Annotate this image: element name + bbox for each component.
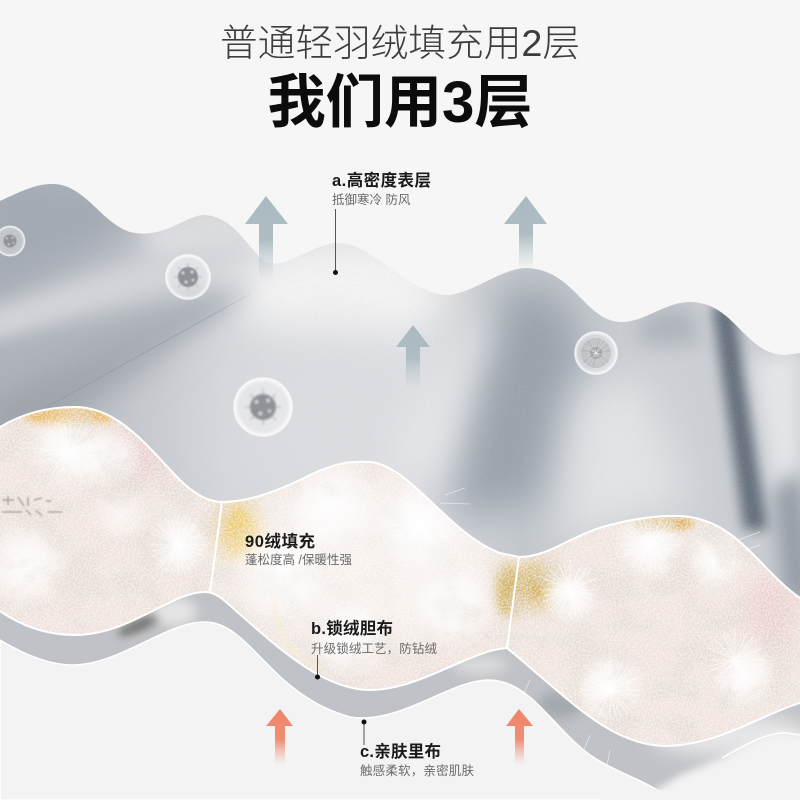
panel: skin-friendly lining white area <box>0 622 800 800</box>
callout: c skin-friendly lining: c.亲肤里布 <box>360 742 441 761</box>
icon: virus bubble upper middle <box>165 254 211 300</box>
callout: 90 down filling: 蓬松度高 /保暖性强 <box>245 552 352 567</box>
panel: outer high-density fabric layer <box>0 184 800 597</box>
panel: down filling layer <box>0 400 800 750</box>
icon: virus bubble right <box>574 331 618 375</box>
callout: b down-proof liner <box>311 618 437 680</box>
callout: 90 down filling: 90绒填充 <box>245 531 316 551</box>
title: normal down jackets: 普通轻羽绒填充用2层 <box>220 22 580 64</box>
arrow: upper right vapour <box>504 196 547 272</box>
outline: down layer edge and stitching <box>0 407 800 746</box>
callout: c skin-friendly lining <box>360 720 474 778</box>
stray down fibres outside the quilted layer <box>440 488 760 770</box>
icon: virus bubble far left <box>0 226 26 256</box>
callout: b down-proof liner: 升级锁绒工艺，防钻绒 <box>311 641 437 656</box>
icon: virus bubble lower middle <box>233 377 293 437</box>
callout: b down-proof liner: b.锁绒胆布 <box>311 618 393 638</box>
panel: inner gray lock-down lining <box>0 593 800 790</box>
callout: c skin-friendly lining: 触感柔软，亲密肌肤 <box>360 763 474 778</box>
arrow: upper left vapour <box>245 196 288 282</box>
callout: a high-density surface: a.高密度表层 <box>332 170 431 190</box>
arrow: warm air left <box>266 709 293 765</box>
callout: 90 down filling <box>245 531 352 567</box>
callout: a high-density surface <box>332 170 431 275</box>
arrow: warm air right <box>506 709 533 765</box>
title: we use three layers: 我们用3层 <box>268 70 532 135</box>
arrow: middle vapour <box>396 325 430 390</box>
callout: a high-density surface: 抵御寒冷 防风 <box>332 192 411 207</box>
